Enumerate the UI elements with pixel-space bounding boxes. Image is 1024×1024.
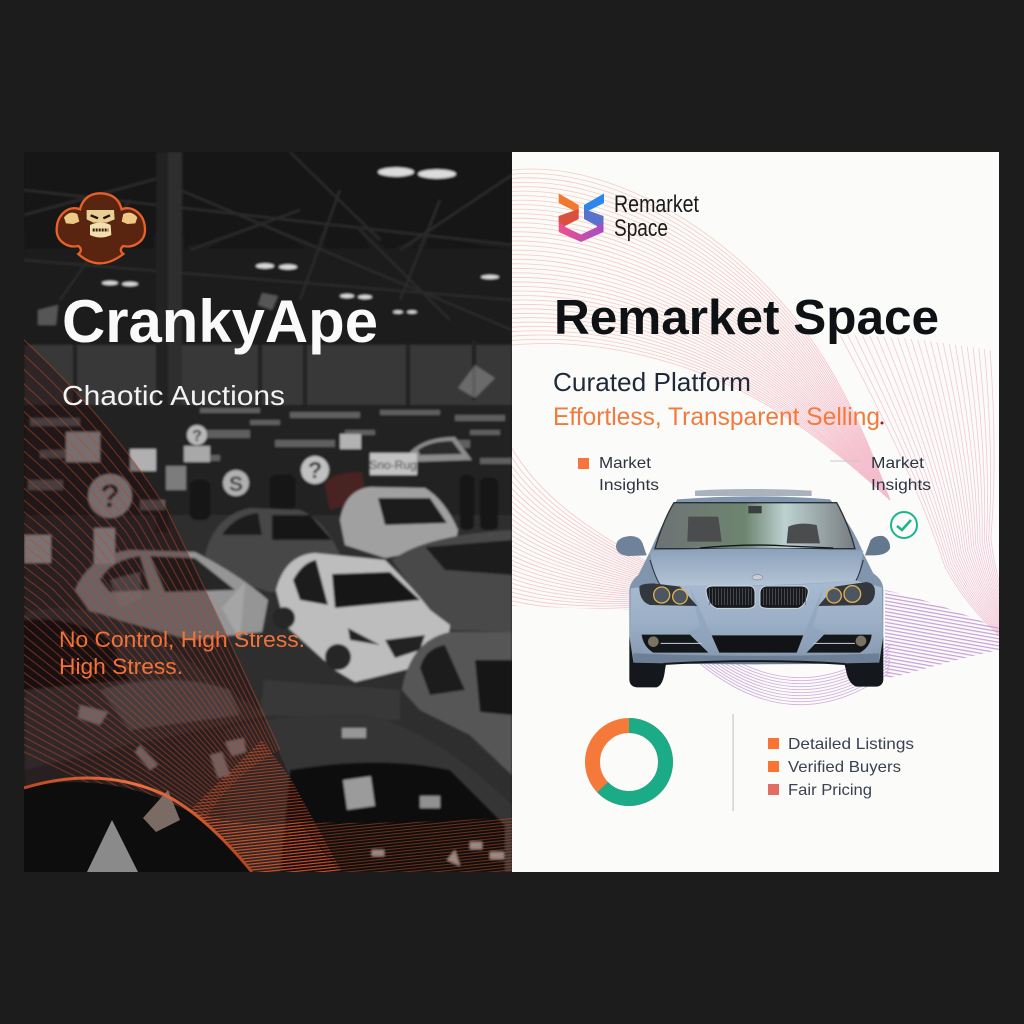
icon: green check (891, 512, 917, 538)
hood (650, 548, 863, 586)
subtitle: Curated Platform: Curated Platform (553, 367, 751, 397)
car: silver left (75, 550, 268, 640)
car: dark right lower (402, 632, 512, 775)
panel: Remarket Space curated platform (512, 152, 999, 872)
paper scraps on foreground (87, 820, 138, 872)
legend list: Fair Pricing (788, 782, 872, 799)
body silhouette (629, 496, 883, 662)
title: CrankyApe: CrankyApe (62, 288, 378, 355)
car: white SUV (340, 487, 458, 558)
photo: auction hall with cars (24, 152, 512, 872)
callout: Market Insights left: Market (599, 455, 652, 472)
logo: Remarket Space: Space (614, 215, 668, 242)
kidney grille (706, 586, 755, 608)
headlights (639, 583, 697, 606)
car: blue-grey BMW front view (616, 489, 890, 687)
logo: Remarket Space (559, 191, 699, 242)
pink line mesh waves (512, 168, 999, 706)
auction signs: Sno-Rug (369, 458, 417, 472)
car: white centre (276, 553, 450, 682)
title: Remarket Space: Remarket Space (554, 291, 939, 345)
auction signs (24, 425, 417, 564)
callout: Market Insights left (578, 455, 659, 494)
dark foreground car under the band (24, 782, 252, 872)
sunroof strip (695, 489, 812, 496)
back wall (24, 345, 512, 407)
car: dark right (392, 530, 512, 632)
car: dark centre (205, 508, 340, 592)
donut chart (592, 726, 666, 798)
callout: Market Insights right: Insights (871, 477, 931, 494)
car: left bottom hood (25, 611, 253, 762)
confetti (38, 293, 504, 866)
lights (102, 168, 499, 314)
floor shadow (260, 680, 400, 720)
divider (732, 714, 734, 811)
wheels (629, 637, 667, 687)
auction signs: ? (192, 428, 202, 445)
auction signs: ? (100, 478, 120, 514)
tagline: No Control, High Stress (59, 627, 305, 679)
car: black foreground (290, 764, 503, 825)
subtitle: Chaotic Auctions: Chaotic Auctions (62, 380, 285, 411)
tagline: No Control, High Stress: No Control, High Stress. (59, 627, 305, 652)
mirrors (616, 536, 647, 556)
callout: Market Insights right: Market (871, 455, 925, 472)
people (190, 475, 498, 530)
legend list (768, 736, 914, 799)
fog lamps (642, 635, 708, 653)
distant crowd of cars (24, 405, 512, 515)
callout: Market Insights left: Insights (599, 477, 659, 494)
windshield (655, 503, 855, 549)
tagline: Effortless, Transparent Selling: Effortless, Transparent Selling (553, 403, 880, 431)
bumper (630, 581, 883, 663)
auction signs: S (229, 473, 243, 496)
column (167, 152, 183, 404)
far white car (410, 437, 472, 462)
orange line mesh wave (24, 340, 512, 872)
lower intake (712, 635, 803, 653)
logo wordmark: Remarket (614, 191, 699, 218)
ceiling trusses (24, 152, 512, 330)
logo: CrankyApe monkey (57, 193, 145, 263)
tagline: No Control, High Stress: High Stress. (59, 654, 183, 679)
legend list: Verified Buyers (788, 759, 901, 776)
callout: Market Insights right (830, 455, 931, 494)
logo mark (559, 194, 604, 242)
panel: CrankyApe chaotic auctions (24, 152, 512, 872)
legend list: Detailed Listings (788, 736, 914, 753)
infographic canvas (24, 152, 999, 872)
auction signs: ? (308, 457, 322, 483)
red-toned car (325, 472, 366, 510)
